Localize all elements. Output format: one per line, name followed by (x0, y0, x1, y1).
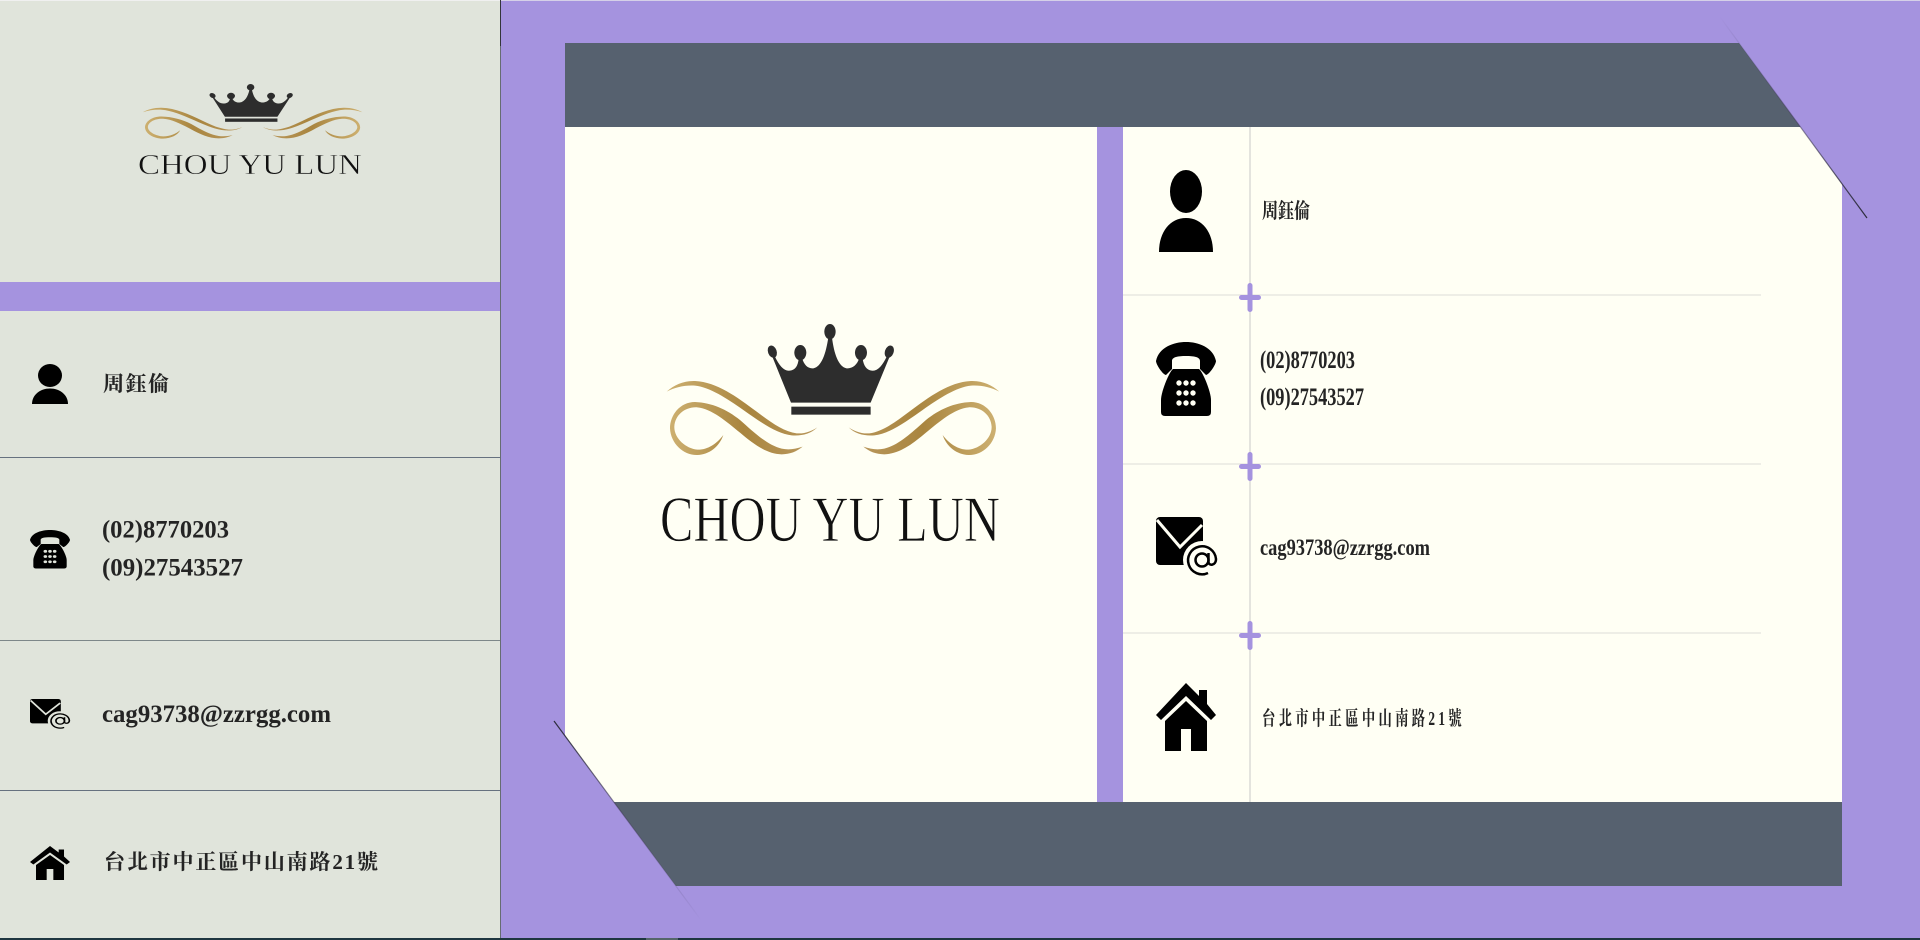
sidebar row: phone: (02)8770203 (102, 516, 229, 544)
panel: business card (501, 0, 1920, 920)
sidebar row: phone (30, 516, 243, 582)
card logo (660, 324, 1000, 556)
sidebar row: email: cag93738@zzrgg.com (102, 701, 331, 728)
sidebar row: name: 周鈺倫 (103, 372, 169, 396)
card row: phone: (09)27543527 (1260, 384, 1364, 411)
card logo: CHOU YU LUN (660, 484, 1000, 556)
card row: name: 周鈺倫 (1262, 199, 1310, 223)
sidebar row: name (32, 364, 169, 404)
bottom dark band (565, 802, 1842, 886)
sidebar row: address (30, 846, 378, 880)
card row: phone (1156, 342, 1364, 416)
plus marker 3 (1242, 624, 1258, 648)
sidebar logo (138, 84, 362, 181)
plus marker 1 (1242, 286, 1258, 310)
sidebar row: email (30, 699, 331, 730)
vertical accent strip (1097, 127, 1123, 802)
card row: phone: (02)8770203 (1260, 347, 1355, 374)
card row: name (1159, 170, 1310, 252)
bottom left corner fold (501, 721, 701, 920)
top dark band (565, 43, 1842, 127)
sidebar row: phone: (09)27543527 (102, 554, 243, 582)
card row: address (1156, 683, 1465, 751)
sidebar logo: CHOU YU LUN (138, 150, 362, 181)
plus marker 2 (1242, 454, 1258, 478)
card row: email: cag93738@zzrgg.com (1260, 535, 1430, 561)
sidebar accent bar (0, 282, 500, 311)
sidebar row: address: 台北市中正區中山南路21號 (104, 850, 378, 874)
card row: email (1156, 517, 1430, 579)
top right corner fold (1720, 0, 1920, 218)
panel: left sidebar (0, 0, 501, 940)
card row: address: 台北市中正區中山南路21號 (1262, 706, 1465, 730)
